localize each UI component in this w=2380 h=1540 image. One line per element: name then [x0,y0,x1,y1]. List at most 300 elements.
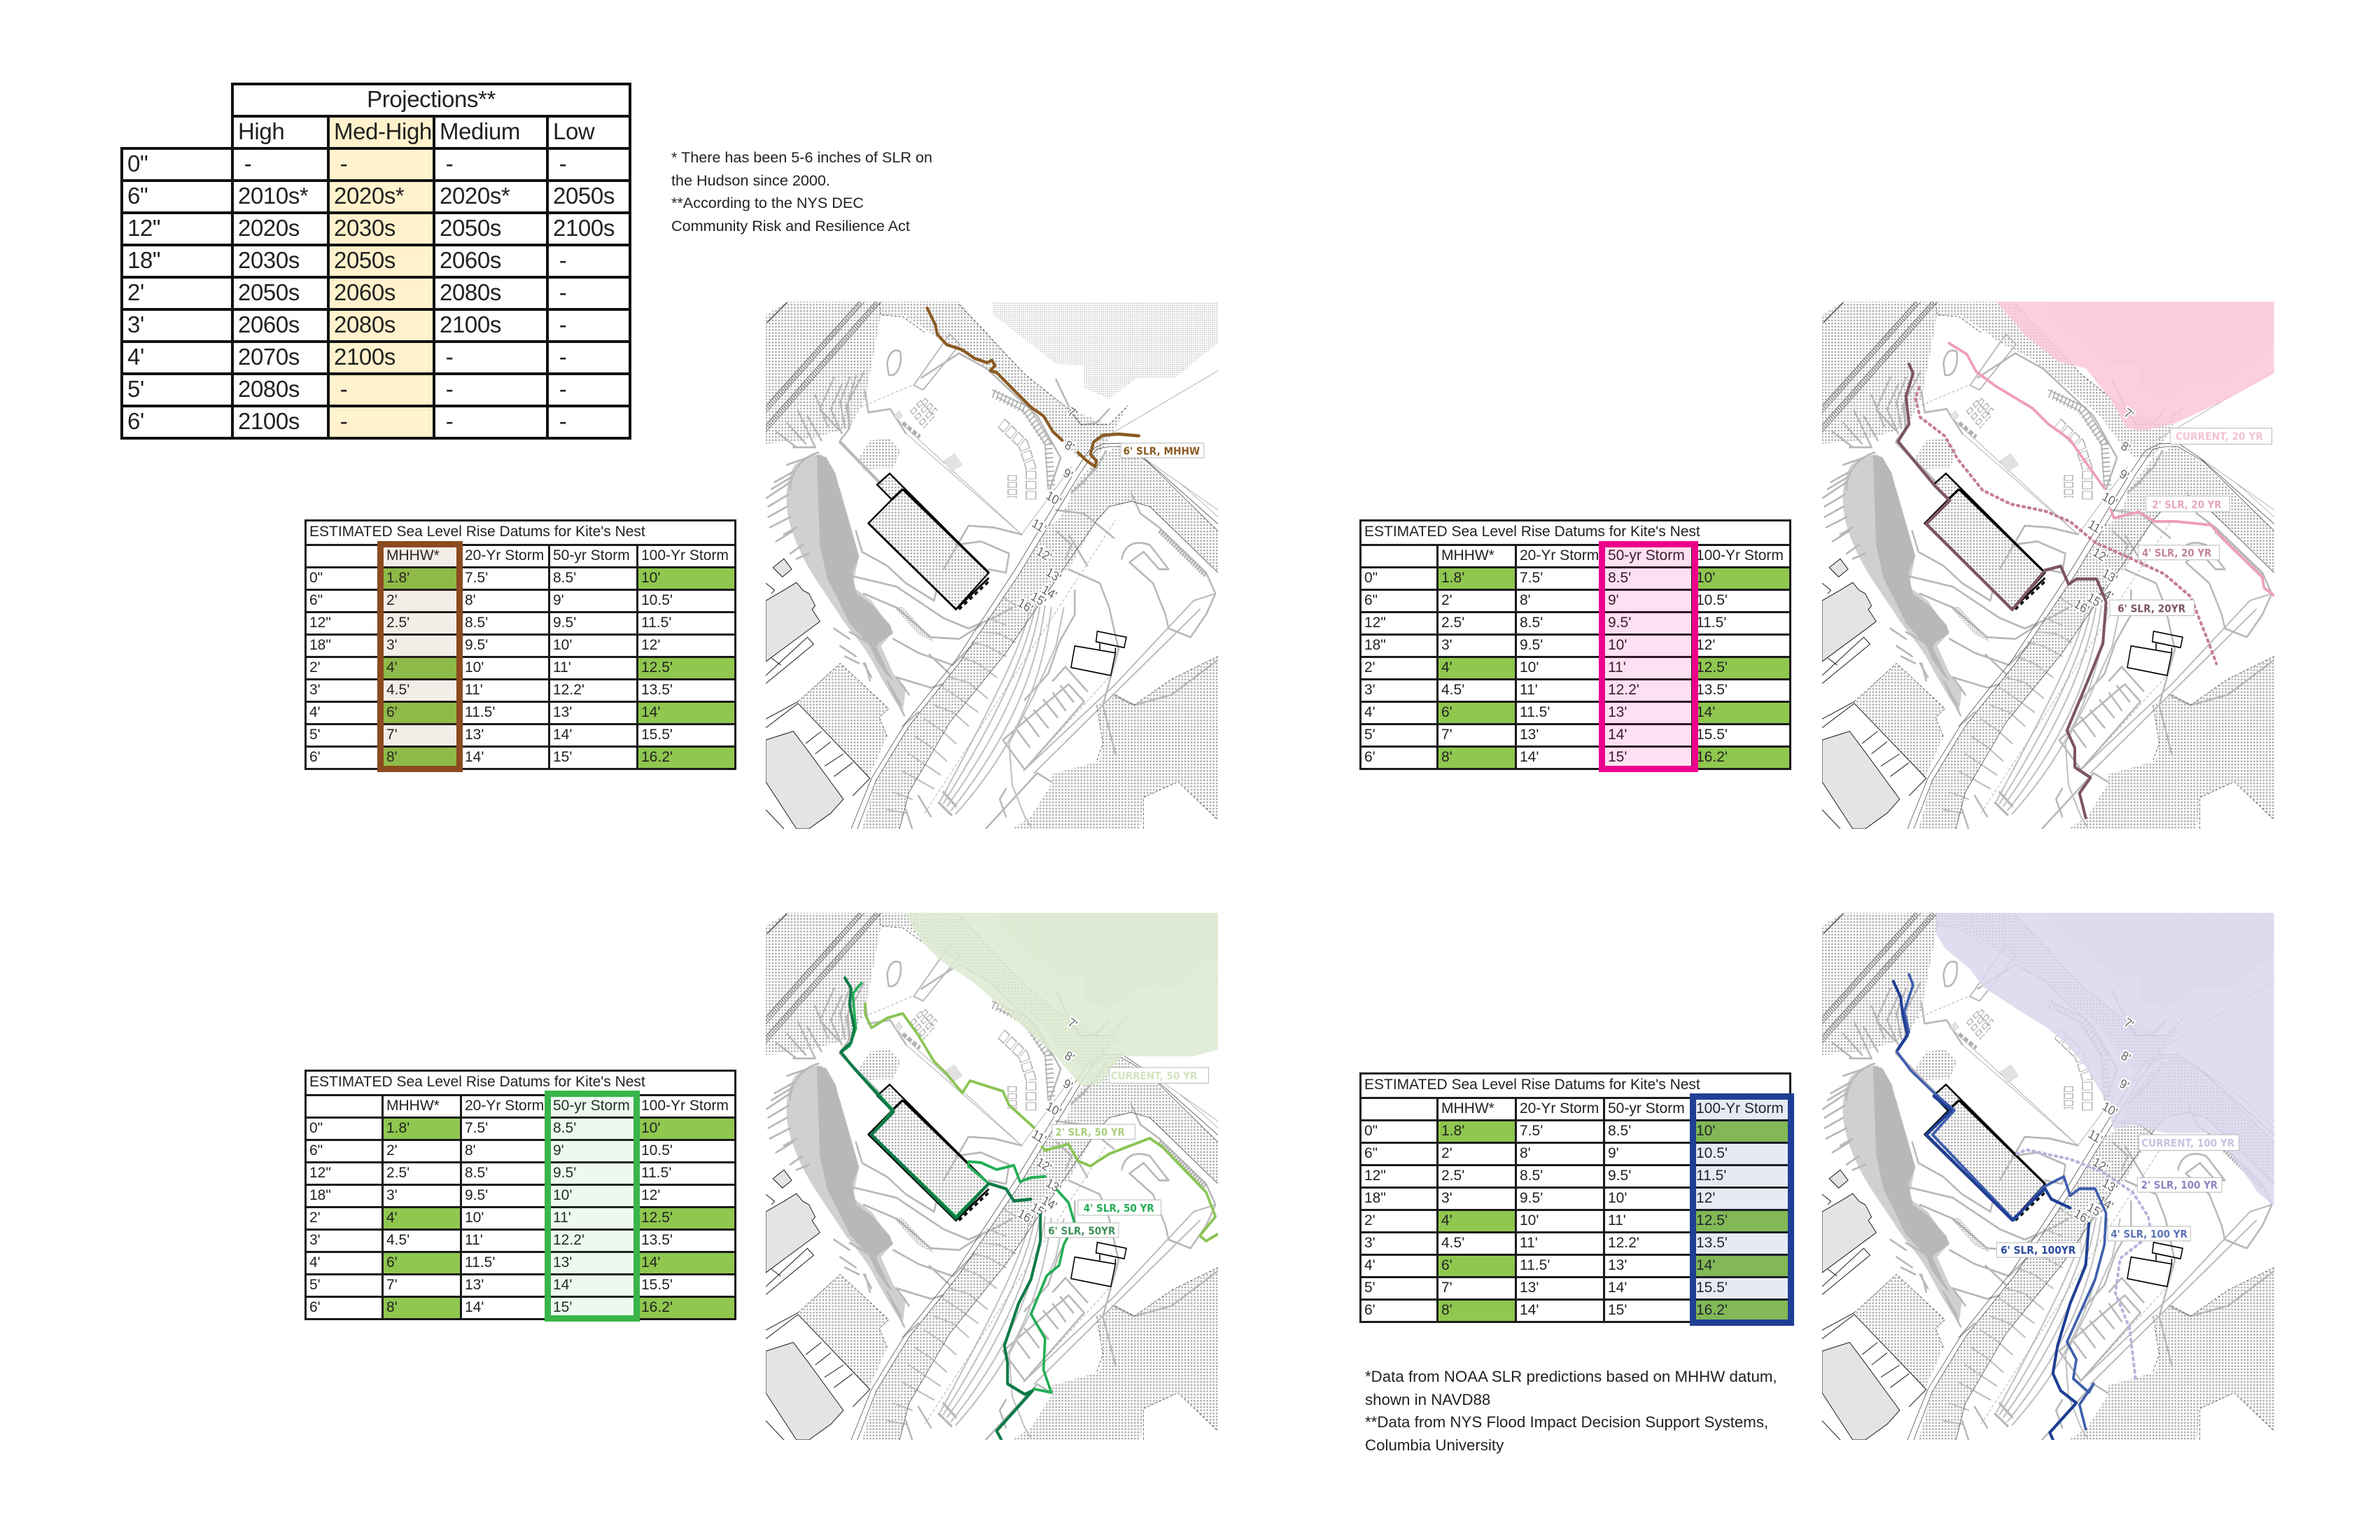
table grid: 8.5' [465,1165,488,1180]
table grid: 100-Yr Storm [1696,1100,1784,1116]
projections footnote: the Hudson since 2000. [671,171,830,189]
table grid: 2' [386,1142,398,1158]
table grid: 18" [1364,1190,1386,1205]
contour labels: 7' [2122,405,2136,423]
table grid: 12.2' [1608,1235,1639,1250]
contour labels: 14' [1040,582,1059,603]
table grid: 8.5' [1520,1168,1543,1183]
table grid: 12.5' [641,1210,673,1225]
table grid: 13' [1520,727,1539,742]
table grid: 0" [309,570,323,585]
flood line: 4 ft SLR [1896,974,2106,1429]
current 50-yr flood area [904,912,1218,1086]
table grid: 14' [465,749,484,764]
site base map [1812,905,2313,1462]
table grid: 13' [1520,1280,1539,1295]
table grid: 13' [553,704,572,720]
table grid: 100-Yr Storm [641,1098,729,1113]
data sources footnote: **Data from NYS Flood Impact Decision Support Systems, [1365,1413,1768,1431]
contour labels: 16' [2072,1205,2092,1227]
datum table: 100-yr storm blue highlight [1359,1072,1794,1326]
table grid: 1.8' [1441,1123,1464,1138]
datum table: 50-yr storm green highlight [304,1070,736,1322]
contour labels: 11' [1030,1126,1049,1147]
table grid: 3' [1364,682,1376,697]
projections table: - [559,343,566,370]
site base map [1812,294,2313,851]
table grid: 5' [309,727,321,742]
table grid: 12' [1696,1190,1715,1205]
table grid: 7.5' [465,1120,488,1135]
table grid: 3' [386,1187,398,1203]
table grid: 10.5' [1696,592,1728,608]
table grid: 15' [553,1299,572,1315]
contour labels: 11' [2086,1126,2105,1147]
table grid: 9.5' [465,1187,488,1203]
table grid: 8.5' [465,615,488,630]
contour labels: 12' [1035,1154,1054,1175]
table grid: 14' [1520,1302,1539,1317]
callout: 6 ft: 6' SLR, 20YR [2118,603,2185,615]
table grid: 16.2' [641,1299,673,1315]
flood line: 2 ft SLR [1949,343,2274,596]
table grid: 13.5' [1696,682,1728,697]
table grid: 6' [386,1254,398,1270]
table grid: 8' [1441,1302,1452,1317]
table grid: 12.2' [553,682,584,697]
table grid: 0" [1364,570,1378,585]
callout: 6 ft [2110,600,2194,615]
table grid: 11' [1520,1235,1538,1250]
highlight column: MHHW [377,541,463,772]
table grid: 10' [1608,1190,1627,1205]
table grid: 12.5' [1696,659,1728,675]
contour labels [2072,1015,2136,1227]
contour labels: 16' [2072,596,2092,617]
contour labels: 9' [1061,1076,1075,1093]
projections table: 2' [127,279,144,305]
table grid: 4.5' [1441,1235,1464,1250]
projections table: 2080s [334,311,396,337]
table grid: 9.5' [1608,615,1631,630]
callout: 2 ft [2146,496,2230,512]
table grid: 9.5' [553,1165,576,1180]
projections footnote: Community Risk and Resilience Act [671,217,910,234]
table grid: 12' [1696,637,1715,652]
datum table: MHHW highlight [304,519,736,772]
flood line: 6 ft SLR MHHW [927,308,1139,466]
table grid: 7' [1441,1280,1452,1295]
projections table: 2010s* [238,182,308,209]
contour labels: 9' [1061,465,1075,482]
contour labels: 12' [1035,543,1054,564]
map: 20-yr storm flood lines [1822,302,2274,829]
table grid: 10' [465,1210,484,1225]
projections table: 2060s [238,311,300,337]
table grid: 11' [553,659,571,675]
contour labels: 13' [2100,1175,2120,1196]
flood overlays [841,912,1218,1440]
projections table: 2050s [334,246,396,273]
table grid: 13.5' [641,1232,673,1247]
table grid: 3' [1441,1190,1452,1205]
table grid: 100-Yr Storm [1696,547,1784,563]
table grid: 7.5' [1520,1123,1543,1138]
table grid: 8.5' [1608,1123,1631,1138]
table grid: 7' [1441,727,1452,742]
current 100-yr flood area [1935,912,2274,1206]
projections table: 3' [127,311,144,337]
table grid: 14' [553,1277,572,1292]
table grid: 6' [1441,1257,1452,1273]
table grid: 7' [386,727,398,742]
table grid: 2' [1441,1145,1452,1161]
projections footnote: * There has been 5-6 inches of SLR on [671,148,932,166]
table grid: ESTIMATED Sea Level Rise Datums for Kite's Nest [309,1074,645,1090]
projections table: - [559,375,566,402]
table grid: 1.8' [386,1120,410,1135]
site base map [756,294,1256,851]
table grid: 15.5' [641,1277,673,1292]
table grid: 11.5' [1696,615,1726,630]
table grid: 13.5' [641,682,673,697]
table grid: 12" [1364,615,1386,630]
table grid: 6" [309,1142,323,1158]
table grid: 15' [553,749,572,764]
table grid: 15.5' [641,727,673,742]
current 20-yr flood area [1996,302,2274,431]
contour labels: 12' [2091,545,2110,566]
table grid: 12.5' [641,659,673,675]
flood line: 4 ft SLR [1915,387,2216,664]
projections table: 6' [127,407,144,434]
table grid: 50-yr Storm [1608,1100,1685,1116]
callout: current: CURRENT, 100 YR [2141,1137,2234,1149]
table grid: 9.5' [1520,1190,1543,1205]
projections table: 2070s [238,343,300,370]
table grid: 6' [1441,704,1452,720]
table grid: 11' [1520,682,1538,697]
table grid: 9' [1608,592,1619,608]
callout: current [2170,428,2272,444]
table grid: 8' [386,1299,398,1315]
contour labels: 9' [2118,466,2132,484]
contour labels: 15' [1029,589,1049,610]
projections table: 6" [127,182,148,209]
data sources footnote: shown in NAVD88 [1365,1390,1490,1408]
table grid: 50-yr Storm [1608,547,1685,563]
table grid: 3' [309,1232,321,1247]
projections table: - [446,407,453,434]
table grid: 2' [1364,1212,1376,1228]
contour labels: 16' [1016,595,1035,616]
table grid: 10.5' [641,592,673,608]
highlight column: 100-yr storm blue [1690,1093,1794,1326]
table grid: 10' [553,637,572,652]
table grid: 6' [309,749,321,764]
table grid: 12.2' [553,1232,584,1247]
table grid: 10' [1696,570,1715,585]
table grid: 4' [309,1254,321,1270]
table grid: 10' [465,659,484,675]
projections table: - [446,343,453,370]
projections table: 0" [127,150,148,176]
table grid: 9.5' [1608,1168,1631,1183]
projections table: 2050s [238,279,300,305]
projections table: 2050s [553,182,615,209]
table grid: 9' [553,1142,564,1158]
callout: 2 ft: 2' SLR, 100 YR [2141,1179,2218,1191]
table grid: 18" [1364,637,1386,652]
table grid: 6' [1364,749,1376,764]
table grid: 3' [1364,1235,1376,1250]
table grid: 0" [1364,1123,1378,1138]
table grid: 14' [641,1254,660,1270]
table grid: 11.5' [465,704,495,720]
table grid: 11.5' [1696,1168,1726,1183]
table grid: 10' [1520,659,1539,675]
projections table: 4' [127,343,144,370]
table grid: 15.5' [1696,1280,1728,1295]
data sources footnote: *Data from NOAA SLR predictions based on MHHW datum, [1365,1368,1777,1385]
table grid: 8' [386,749,398,764]
table grid: 4' [309,704,321,720]
table grid: 12" [309,1165,331,1180]
projections table: 2020s* [440,182,510,209]
table grid: 9' [553,592,564,608]
table grid: 4.5' [1441,682,1464,697]
data sources footnote: Columbia University [1365,1436,1504,1453]
contour labels: 15' [1029,1199,1049,1221]
contour labels: 10' [2100,1098,2120,1119]
table grid: 7' [386,1277,398,1292]
table grid: 11' [465,682,483,697]
contour labels: 16' [1016,1205,1035,1227]
table grid: 4' [1441,1212,1452,1228]
table grid: 2' [386,592,398,608]
table grid: MHHW* [1441,547,1494,563]
callout: 4 ft: 4' SLR, 20 YR [2142,547,2211,559]
contour labels: 13' [2100,566,2120,587]
table grid: 10' [1520,1212,1539,1228]
projections table: - [559,407,566,434]
flood line: 6 ft SLR [1898,364,2106,818]
projections table: - [559,311,566,337]
table grid: 4.5' [386,682,410,697]
table grid: 6' [386,704,398,720]
contour labels [1016,1015,1079,1227]
table grid: 20-Yr Storm [465,1098,544,1113]
table grid: 13.5' [1696,1235,1728,1250]
table grid: 10.5' [641,1142,673,1158]
table grid: 1.8' [386,570,410,585]
table grid: 13' [465,727,484,742]
table grid: 16.2' [1696,749,1728,764]
contour labels: 8' [2119,438,2133,456]
contour labels: 8' [1063,437,1077,455]
table grid: 100-Yr Storm [641,547,729,563]
table grid: 12" [309,615,331,630]
table grid: 6' [1364,1302,1376,1317]
table grid: MHHW* [386,547,440,563]
table grid: 12' [641,1187,660,1203]
table grid: 9' [1608,1145,1619,1161]
table grid: 13' [1608,704,1627,720]
table grid: 18" [309,637,331,652]
table grid: 2' [309,1210,321,1225]
projections table: 2060s [440,246,501,273]
table grid: 6" [1364,592,1378,608]
table grid [304,519,736,770]
projections table: - [559,246,566,273]
contour labels: 9' [2118,1076,2132,1093]
table grid: 14' [1696,704,1715,720]
projections table: 2030s [238,246,300,273]
projections table: 2020s* [334,182,404,209]
table grid: 6" [1364,1145,1378,1161]
data sources footnote [1365,1368,1777,1453]
table grid: 15' [1608,749,1627,764]
contour labels: 10' [1044,1098,1063,1119]
table grid: MHHW* [386,1098,440,1113]
table grid: 5' [309,1277,321,1292]
table grid: 6" [309,592,323,608]
projections table: 2030s [334,214,396,241]
projections table: 5' [127,375,144,402]
table grid: 10.5' [1696,1145,1728,1161]
table grid: 3' [1441,637,1452,652]
table grid: ESTIMATED Sea Level Rise Datums for Kite's Nest [1364,1077,1700,1093]
flood line: 2 ft SLR [865,1004,1218,1241]
contour labels: 14' [2096,582,2115,604]
table grid: 10' [1696,1123,1715,1138]
table grid: 9.5' [465,637,488,652]
table grid: 8' [1520,592,1531,608]
table grid: 16.2' [641,749,673,764]
table grid: 8.5' [553,570,576,585]
projections table: 2060s [334,279,396,305]
table grid: 4' [386,1210,398,1225]
flood line: 2 ft SLR [1933,1135,2151,1380]
projections table: Projections** [367,85,496,112]
callout: 6 ft: 6' SLR, 100YR [2001,1245,2076,1256]
projections table: - [340,150,347,176]
table grid: 11.5' [465,1254,495,1270]
contour labels: 13' [1044,564,1063,585]
callout: 2 ft: 2' SLR, 20 YR [2152,498,2221,511]
table grid: 14' [465,1299,484,1315]
table grid: 11' [1608,659,1626,675]
projections table: 2020s [238,214,300,241]
table grid: 5' [1364,727,1376,742]
projections table: High [238,118,284,144]
callout: 2 ft: 2' SLR, 50 YR [1056,1126,1125,1139]
table grid: 7.5' [1520,570,1543,585]
contour labels: 14' [2096,1192,2115,1214]
table grid: 13' [1608,1257,1627,1273]
table grid: 4' [386,659,398,675]
contour labels: 11' [1030,515,1049,536]
callout: 6 ft: 6' SLR, 50YR [1048,1225,1115,1238]
table grid: 9.5' [1520,637,1543,652]
table grid: 2' [309,659,321,675]
contour labels: 7' [1065,404,1079,421]
table grid: 50-yr Storm [553,547,630,563]
callout: 4 ft: 4' SLR, 100 YR [2110,1228,2188,1240]
map: 100-yr storm flood lines [1822,913,2274,1440]
table grid: 8.5' [553,1120,576,1135]
contour labels: 10' [2100,489,2120,510]
table grid: 11' [465,1232,483,1247]
projections table: - [340,407,347,434]
table grid: 6' [309,1299,321,1315]
projections table: - [446,375,453,402]
projections footnote: **According to the NYS DEC [671,194,864,211]
table grid: 8' [1520,1145,1531,1161]
table grid: 12' [641,637,660,652]
flood line: 4 ft SLR [841,983,1074,1392]
projections table: 2100s [553,214,615,241]
table grid: 14' [1608,727,1627,742]
table grid: 20-Yr Storm [1520,1100,1599,1116]
projections table: 18" [127,246,160,273]
projections table: - [244,150,251,176]
table grid: 3' [309,682,321,697]
projections table: Low [553,118,594,144]
contour labels: 10' [1044,488,1063,509]
projections table: 2100s [238,407,300,434]
table grid: 13' [465,1277,484,1292]
table grid: 0" [309,1120,323,1135]
table grid: 10' [1608,637,1627,652]
flood overlays [1898,302,2274,818]
table grid: 14' [641,704,660,720]
table grid: 11' [1608,1212,1626,1228]
table grid: 4.5' [386,1232,410,1247]
map: 6 ft SLR at MHHW [766,302,1218,829]
contour labels: 8' [1063,1048,1077,1065]
table grid: 11.5' [641,615,671,630]
table grid: 11.5' [1520,704,1550,720]
contour labels: 15' [2085,589,2105,611]
table grid: 12" [1364,1168,1386,1183]
table grid: 13' [553,1254,572,1270]
contour labels: 12' [2091,1154,2110,1175]
contour labels: 8' [2119,1048,2133,1065]
site base map [756,905,1256,1462]
table grid: 5' [1364,1280,1376,1295]
table grid: 20-Yr Storm [1520,547,1599,563]
table grid: ESTIMATED Sea Level Rise Datums for Kite's Nest [1364,524,1700,540]
contour labels: 14' [1040,1192,1059,1214]
projections table: 2080s [440,279,501,305]
table grid: 12.5' [1696,1212,1728,1228]
table grid: 2' [1441,592,1452,608]
highlight column: 50-yr storm green [545,1091,640,1322]
table grid: 4' [1364,1257,1376,1273]
projections footnote [671,148,932,234]
table grid: 15' [1608,1302,1627,1317]
table grid: 4' [1364,704,1376,720]
projections table: - [340,375,347,402]
table grid: 16.2' [1696,1302,1728,1317]
callout: 6 ft SLR, MHHW: 6' SLR, MHHW [1124,445,1200,458]
projections table: 2100s [440,311,501,337]
table grid: 1.8' [1441,570,1464,585]
table grid: 14' [1696,1257,1715,1273]
table grid: 11.5' [641,1165,671,1180]
projections table: 2080s [238,375,300,402]
